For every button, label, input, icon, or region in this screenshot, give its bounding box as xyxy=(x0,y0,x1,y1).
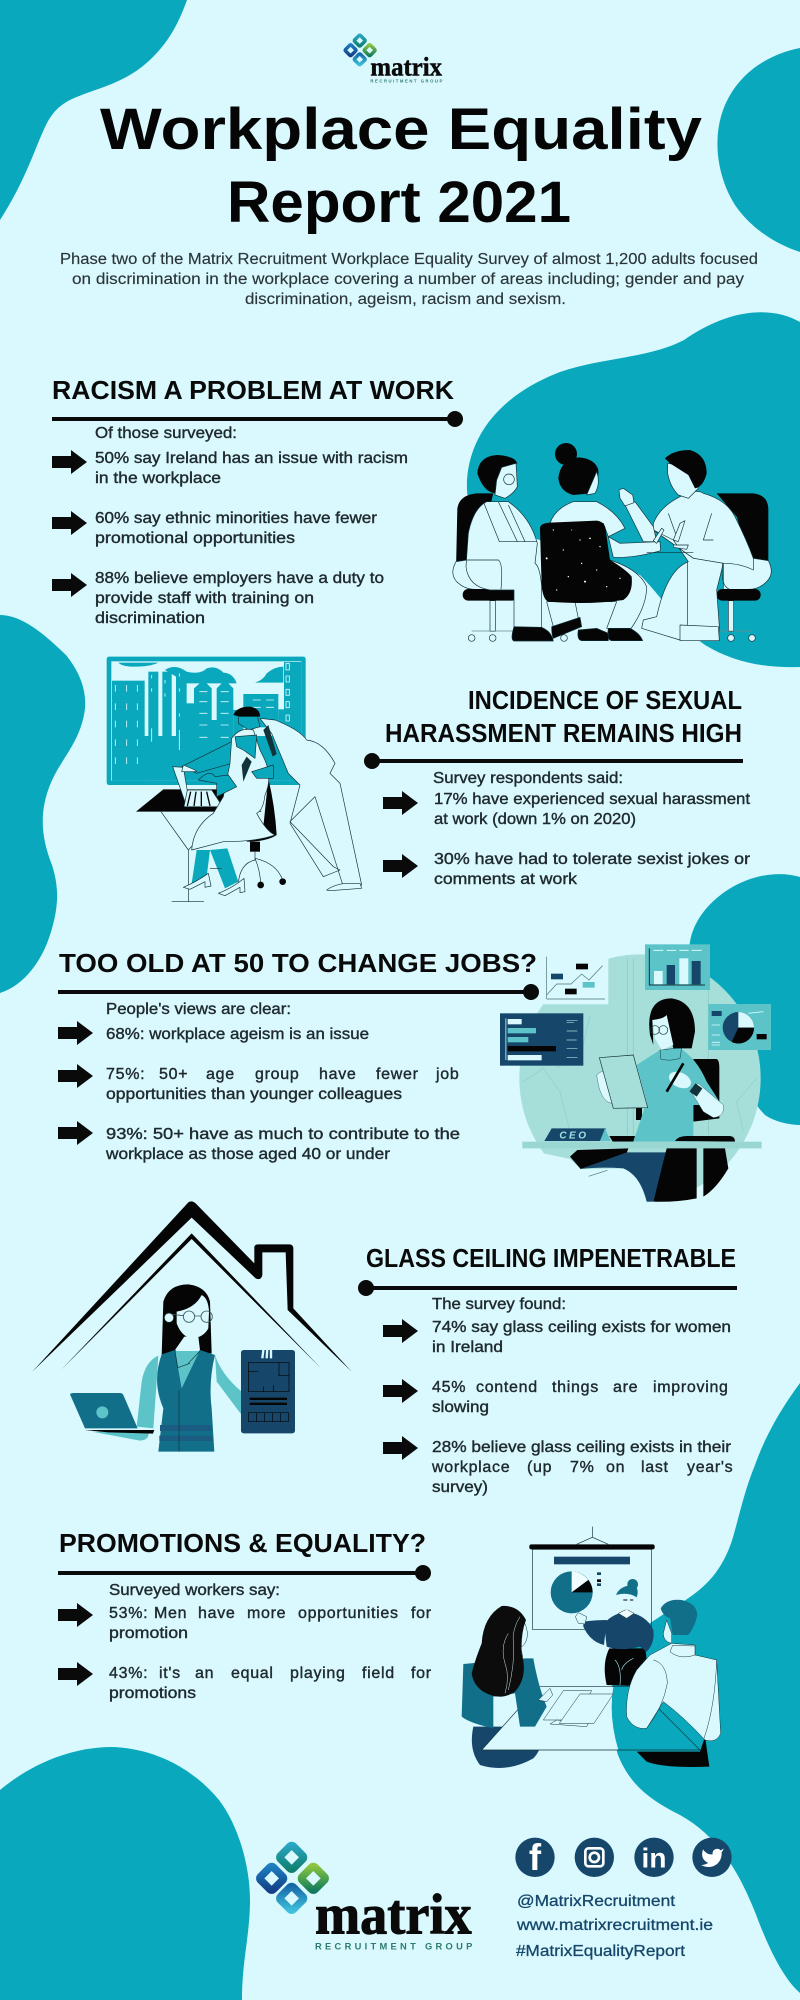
contact details: www.matrixrecruitment.ie xyxy=(516,1917,713,1934)
text block: glass ceiling findings: survey) xyxy=(432,1479,488,1496)
text block: promotions findings: equal xyxy=(231,1665,274,1682)
text block: racism findings: 88% believe employers have a duty to xyxy=(95,570,384,587)
title xyxy=(100,97,702,235)
text block: promotions findings: for xyxy=(411,1605,432,1622)
arrows: glass ceiling xyxy=(383,1319,418,1460)
text block: promotions findings: 43%: xyxy=(109,1665,148,1682)
heading: sexual harassment xyxy=(385,687,742,748)
text block: racism findings: discrimination xyxy=(95,610,205,627)
divider: racism xyxy=(52,411,463,427)
illustration: three colleagues meeting xyxy=(453,443,771,641)
text block: glass ceiling findings: slowing xyxy=(432,1399,489,1416)
header logo xyxy=(345,35,443,84)
illustration: CEO woman with charts: CEO xyxy=(559,1131,586,1142)
illustration: man leaning over woman at desk xyxy=(107,657,362,902)
text block: glass ceiling findings: contend xyxy=(476,1379,538,1396)
text block: harassment findings: comments at work xyxy=(434,871,578,888)
text block: promotions findings: opportunities xyxy=(298,1605,399,1622)
contact details: #MatrixEqualityReport xyxy=(516,1943,686,1960)
text block: glass ceiling findings: are xyxy=(613,1379,638,1396)
text block: harassment findings: 17% have experienced sexual harassment xyxy=(434,791,751,808)
text block: ageism findings xyxy=(105,1001,460,1163)
intro paragraph: Phase two of the Matrix Recruitment Workplace Equality Survey of almost 1,200 adults focused xyxy=(60,251,758,268)
text block: promotions findings: playing xyxy=(290,1665,346,1682)
header logo: RECRUITMENT GROUP xyxy=(370,79,443,84)
heading: racism: RACISM A PROBLEM AT WORK xyxy=(52,377,455,405)
text block: ageism findings: 75%: xyxy=(106,1066,145,1083)
heading: ageism: TOO OLD AT 50 TO CHANGE JOBS? xyxy=(59,950,537,978)
text block: harassment findings xyxy=(433,770,751,888)
text block: promotions findings: have xyxy=(198,1605,236,1622)
text block: promotions findings: promotion xyxy=(109,1625,188,1642)
text block: promotions findings: Men xyxy=(154,1605,187,1622)
divider: ageism xyxy=(58,984,539,1000)
title: Workplace Equality xyxy=(100,97,702,162)
text block: glass ceiling findings: last xyxy=(641,1459,669,1476)
text block: racism findings: 50% say Ireland has an issue with racism xyxy=(95,450,408,467)
intro paragraph: on discrimination in the workplace covering a number of areas including; gender and pay xyxy=(72,271,744,288)
text block: ageism findings: opportunities than younger colleagues xyxy=(106,1086,402,1103)
arrows: harassment xyxy=(383,791,418,878)
footer logo xyxy=(259,1845,472,1951)
text block: glass ceiling findings xyxy=(431,1296,733,1496)
text block: harassment findings: at work (down 1% on 2020) xyxy=(434,811,636,828)
divider: promotions xyxy=(58,1565,431,1581)
contact details xyxy=(516,1893,713,1960)
panel: glass ceiling xyxy=(32,1201,737,1496)
text block: ageism findings: fewer xyxy=(376,1066,419,1083)
panel: racism xyxy=(52,377,771,641)
illustration: woman under roof xyxy=(32,1201,352,1452)
footer logo: RECRUITMENT GROUP xyxy=(315,1941,472,1951)
text block: promotions findings: 53%: xyxy=(109,1605,148,1622)
text block: promotions findings: an xyxy=(195,1665,214,1682)
arrows: ageism xyxy=(58,1021,93,1145)
social icons: f xyxy=(529,1837,542,1878)
text block: glass ceiling findings: workplace xyxy=(431,1459,510,1476)
illustration: CEO woman with charts xyxy=(500,944,771,1207)
text block: promotions findings: more xyxy=(247,1605,286,1622)
text block: ageism findings: age xyxy=(206,1066,235,1083)
panel: promotions xyxy=(58,1527,721,1768)
text block: glass ceiling findings: 45% xyxy=(432,1379,466,1396)
text block: glass ceiling findings: The survey found: xyxy=(432,1296,566,1313)
text block: racism findings xyxy=(95,425,408,627)
text block: ageism findings: 93%: 50+ have as much to contribute to the xyxy=(106,1126,460,1143)
text block: promotions findings: it's xyxy=(159,1665,181,1682)
text block: ageism findings: 50+ xyxy=(159,1066,188,1083)
text block: glass ceiling findings: in Ireland xyxy=(432,1339,503,1356)
social icons: in xyxy=(642,1842,666,1873)
text block: glass ceiling findings: 28% believe glass ceiling exists in their xyxy=(432,1439,732,1456)
text block: glass ceiling findings: 7% xyxy=(570,1459,595,1476)
text block: glass ceiling findings: improving xyxy=(653,1379,729,1396)
text block: harassment findings: Survey respondents said: xyxy=(433,770,623,787)
text block: promotions findings xyxy=(109,1582,432,1702)
arrows: promotions xyxy=(58,1603,93,1686)
text block: ageism findings: 68%: workplace ageism is an issue xyxy=(106,1026,369,1043)
panel: ageism xyxy=(58,944,771,1207)
text block: glass ceiling findings: on xyxy=(606,1459,625,1476)
footer logo: matrix xyxy=(315,1884,472,1946)
text block: racism findings: provide staff with training on xyxy=(95,590,314,607)
header logo: matrix xyxy=(370,52,442,81)
text block: promotions findings: promotions xyxy=(109,1685,196,1702)
text block: ageism findings: job xyxy=(435,1066,459,1083)
text block: promotions findings: for xyxy=(411,1665,432,1682)
text block: racism findings: Of those surveyed: xyxy=(95,425,237,442)
text block: ageism findings: group xyxy=(255,1066,299,1083)
text block: glass ceiling findings: year's xyxy=(687,1459,733,1476)
text block: harassment findings: 30% have had to tolerate sexist jokes or xyxy=(434,851,751,868)
text block: glass ceiling findings: things xyxy=(552,1379,599,1396)
intro paragraph xyxy=(60,251,758,308)
text block: ageism findings: workplace as those aged 40 or under xyxy=(105,1146,391,1163)
contact details: @MatrixRecruitment xyxy=(517,1893,676,1910)
heading: sexual harassment: INCIDENCE OF SEXUAL xyxy=(468,687,742,715)
divider: sexual harassment xyxy=(364,753,743,769)
heading: sexual harassment: HARASSMENT REMAINS HIGH xyxy=(385,720,742,748)
text block: promotions findings: Surveyed workers say: xyxy=(109,1582,280,1599)
heading: glass ceiling: GLASS CEILING IMPENETRABLE xyxy=(366,1245,736,1273)
divider: glass ceiling xyxy=(358,1280,737,1296)
text block: racism findings: 60% say ethnic minorities have fewer xyxy=(95,510,378,527)
text block: promotions findings: field xyxy=(362,1665,395,1682)
text block: racism findings: promotional opportunities xyxy=(95,530,295,547)
social icons xyxy=(515,1837,732,1878)
text block: glass ceiling findings: (up xyxy=(527,1459,552,1476)
text block: glass ceiling findings: 74% say glass ceiling exists for women xyxy=(432,1319,731,1336)
intro paragraph: discrimination, ageism, racism and sexism. xyxy=(245,291,566,308)
heading: promotions: PROMOTIONS & EQUALITY? xyxy=(59,1530,426,1558)
text block: racism findings: in the workplace xyxy=(95,470,221,487)
title: Report 2021 xyxy=(227,170,571,235)
text block: ageism findings: People's views are clear: xyxy=(106,1001,291,1018)
illustration: presentation meeting xyxy=(462,1527,721,1768)
panel: sexual harassment xyxy=(107,657,751,902)
arrows: racism xyxy=(52,450,87,597)
text block: ageism findings: have xyxy=(319,1066,356,1083)
